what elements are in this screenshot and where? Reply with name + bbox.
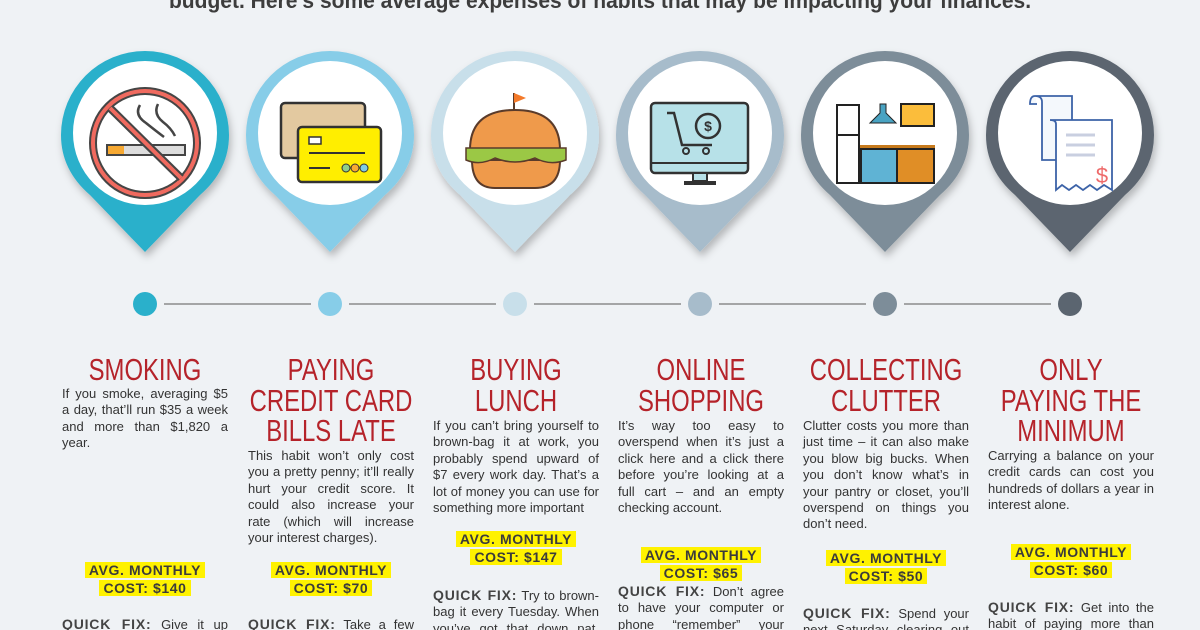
callout: cost: COST: $140 — [103, 580, 187, 596]
panel: minimum — [988, 352, 1154, 630]
callout: cost — [1011, 544, 1131, 578]
heading: BUYING — [470, 352, 562, 387]
heading — [638, 352, 764, 418]
text block: It’s way too easy to overspend when it’s just a click here and a click there before you’re looking at a full cart – and an empty checking account. — [618, 418, 784, 515]
panel: lunch — [433, 352, 599, 630]
pins and timeline — [59, 51, 1160, 316]
callout: cost: COST: $50 — [849, 568, 923, 584]
text block: Clutter costs you more than just time – it can also make you blow big bucks. When you don’t know what’s in your pantry or closet, you’ll overspend on things you don’t need. — [803, 418, 969, 531]
callout: cost: AVG. MONTHLY — [275, 562, 387, 578]
heading: MINIMUM — [1017, 413, 1125, 448]
pin: smoking — [61, 51, 229, 252]
heading — [1001, 352, 1141, 448]
text block: If you can’t bring yourself to brown-bag it at work, you probably spend upward of $7 every work day. That’s a lot of money you can use for something more important — [433, 418, 599, 515]
timeline line — [164, 303, 1051, 305]
callout: cost — [85, 562, 205, 596]
timeline dots — [133, 292, 1082, 316]
heading: ONLINE — [657, 352, 745, 387]
callout: cost: AVG. MONTHLY — [645, 547, 757, 563]
callout: cost — [456, 531, 576, 565]
callout: cost: AVG. MONTHLY — [460, 531, 572, 547]
callout: cost: AVG. MONTHLY — [89, 562, 201, 578]
heading: ONLY — [1039, 352, 1103, 387]
callout: cost — [641, 547, 761, 581]
heading: PAYING — [288, 352, 374, 387]
callout: cost: AVG. MONTHLY — [830, 550, 942, 566]
pin: minimum — [986, 51, 1154, 252]
callout: cost — [826, 550, 946, 584]
text block: This habit won’t only cost you a pretty penny; it’ll really hurt your credit score. It could also increase your rate (which will increase your interest charges). — [248, 448, 414, 545]
callout: cost — [271, 562, 391, 596]
panel: credit card — [248, 352, 414, 630]
text block: If you smoke, averaging $5 a day, that’ll run $35 a week and more than $1,820 a year. — [62, 386, 228, 450]
pin: credit card — [246, 51, 414, 252]
heading: CREDIT CARD — [250, 382, 412, 418]
callout: cost: COST: $70 — [294, 580, 368, 596]
panel: smoking — [62, 352, 228, 630]
panel: clutter — [802, 352, 969, 630]
heading: SHOPPING — [638, 382, 764, 418]
callout: cost: COST: $147 — [474, 548, 558, 564]
callout: cost: AVG. MONTHLY — [1015, 544, 1127, 560]
heading: PAYING THE — [1001, 382, 1141, 418]
pin: online shopping: $ — [704, 118, 712, 134]
pin: minimum: $ — [1096, 163, 1108, 188]
pin: lunch — [431, 51, 599, 252]
heading — [470, 352, 562, 418]
heading: LUNCH — [475, 382, 557, 418]
text block: Carrying a balance on your credit cards can cost you hundreds of dollars a year in interest alone. — [988, 448, 1154, 512]
callout: cost: COST: $65 — [664, 564, 738, 580]
pin: clutter — [801, 51, 969, 252]
heading — [250, 352, 412, 448]
heading — [810, 352, 962, 418]
pin: online shopping — [616, 51, 784, 252]
heading: SMOKING — [89, 352, 201, 387]
heading: CLUTTER — [831, 382, 941, 418]
callout: cost: COST: $60 — [1034, 562, 1108, 578]
heading: BILLS LATE — [266, 413, 396, 448]
panel: online shopping — [618, 352, 784, 630]
heading: COLLECTING — [810, 352, 962, 387]
